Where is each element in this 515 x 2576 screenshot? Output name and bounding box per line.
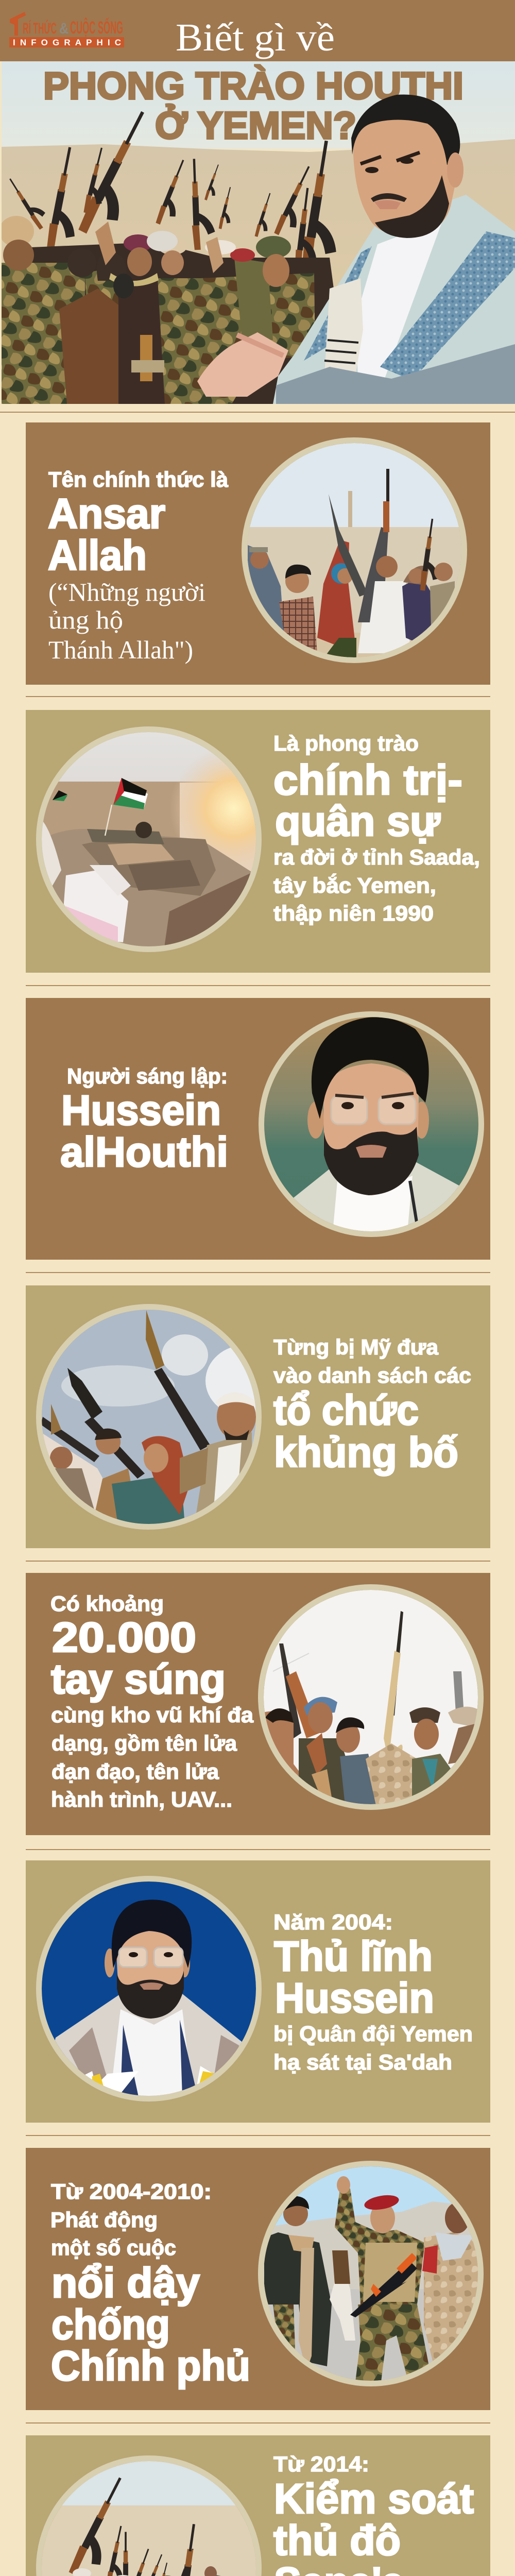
text: fighters and arsenal: dạng, gồm tên lửa — [52, 1731, 237, 1755]
text: fighters and arsenal: Có khoảng — [50, 1591, 164, 1616]
text: founder — [60, 1064, 228, 1176]
text: founder: Hussein — [61, 1087, 221, 1134]
text: movement description: chính trị- — [273, 757, 462, 804]
section 6 — [26, 1860, 490, 2136]
text: US list — [273, 1335, 471, 1476]
panel 6: 2004 killing of Hussein — [26, 1860, 490, 2123]
text: fighters and arsenal: hành trình, UAV... — [51, 1787, 232, 1811]
photo ring — [261, 1587, 481, 1807]
logo: Tri Thuc & Cuoc Song Infographic: RÍ THỨC — [23, 20, 57, 37]
text: year 2004: Năm 2004: — [273, 1910, 393, 1934]
text: movement description: thập niên 1990 — [273, 901, 434, 925]
text: control of the capital: thủ đô — [273, 2517, 401, 2564]
photo ring — [39, 2459, 259, 2576]
photo: Hussein portrait on blue — [39, 1878, 259, 2099]
section 7 — [26, 2148, 490, 2424]
text: uprisings: chống — [52, 2301, 170, 2348]
text: year 2004: Hussein — [275, 1975, 434, 2022]
section 8 — [26, 2435, 490, 2576]
logo: Tri Thuc & Cuoc Song Infographic — [9, 12, 124, 47]
title lines 2 and 3: Ở YEMEN? — [155, 104, 356, 147]
text: year 2004 — [273, 1910, 473, 2074]
text: uprisings: một số cuộc — [51, 2235, 176, 2260]
photo ring — [244, 440, 465, 660]
text: US list: tổ chức — [273, 1387, 419, 1434]
photo: fighters against white sky — [261, 1587, 481, 1810]
text: year 2004: Thủ lĩnh — [274, 1933, 433, 1980]
crowd of fighters — [0, 216, 340, 404]
panel 1: official name — [26, 422, 490, 685]
photo: fighters firing behind stone wall — [36, 726, 262, 952]
logo: Tri Thuc & Cuoc Song Infographic: & — [59, 20, 68, 37]
header banner — [0, 0, 515, 61]
text: movement description: ra đời ở tỉnh Saada, — [273, 845, 480, 869]
section 5 — [26, 1573, 490, 1850]
text: official name: Allah — [48, 532, 147, 579]
title lines 2 and 3 — [43, 64, 464, 147]
header section — [0, 0, 515, 413]
photo ring — [39, 730, 259, 949]
text: uprisings: Phát động — [50, 2208, 158, 2232]
text: uprisings: nổi dậy — [52, 2260, 200, 2307]
hero photo with title — [0, 61, 515, 404]
panel 3: founder — [26, 998, 490, 1260]
text: founder: Người sáng lập: — [67, 1064, 228, 1088]
text: US list: Từng bị Mỹ đưa — [273, 1335, 439, 1359]
text: control of the capital: Kiểm soát — [274, 2476, 474, 2522]
text: fighters and arsenal: 20.000 — [52, 1614, 196, 1661]
text: control of the capital: Từ 2014: — [273, 2452, 369, 2476]
photo ring — [39, 1878, 259, 2099]
text: movement description — [273, 731, 480, 925]
photo ring — [262, 1014, 481, 1234]
text: official name: ủng hộ — [48, 605, 123, 634]
text: US list: vào danh sách các — [273, 1363, 471, 1387]
photo ring — [261, 2164, 481, 2383]
rifles raised by the crowd — [9, 111, 336, 258]
text: uprisings — [50, 2179, 250, 2389]
section 1 — [26, 422, 490, 697]
section 4 — [26, 1285, 490, 1562]
text: fighters and arsenal — [50, 1591, 254, 1811]
text: official name — [48, 467, 229, 664]
text: uprisings: Từ 2004-2010: — [51, 2179, 212, 2204]
text: official name: (“Những người — [48, 578, 205, 606]
text: official name: Ansar — [48, 490, 165, 537]
text: control of the capital — [273, 2452, 479, 2576]
text: movement description: quân sự — [275, 798, 441, 845]
logo: Tri Thuc & Cuoc Song Infographic: CUỘC SỐNG — [70, 18, 123, 38]
photo: armed tribesmen by a wall — [244, 440, 465, 661]
panel 8: control of Sana'a — [26, 2435, 490, 2576]
title line 1: Biết gì về — [176, 16, 335, 59]
text: movement description: tây bắc Yemen, — [273, 873, 436, 897]
text: fighters and arsenal: tay súng — [51, 1656, 226, 1703]
text: official name: Tên chính thức là — [48, 467, 229, 492]
text: fighters and arsenal: đạn đạo, tên lửa — [52, 1759, 219, 1784]
panel 5: 20,000 gunmen — [26, 1573, 490, 1835]
text: uprisings: Chính phủ — [51, 2343, 250, 2389]
photo ring — [39, 1307, 259, 1527]
panel 4: US terrorist list — [26, 1285, 490, 1548]
text: year 2004: bị Quân đội Yemen — [273, 2022, 473, 2046]
text: official name: Thánh Allah") — [48, 635, 193, 664]
photo: crowd of armed fighters — [39, 2459, 259, 2576]
panel 2: politico-military movement — [26, 710, 490, 973]
text: year 2004: hạ sát tại Sa'dah — [273, 2050, 452, 2074]
section 3 — [26, 998, 490, 1273]
photo: Hussein al-Houthi portrait — [262, 1014, 481, 1234]
text: US list: khủng bố — [274, 1429, 458, 1476]
title lines 2 and 3: PHONG TRÀO HOUTHI — [43, 64, 464, 107]
panel 7: uprisings 2004-2010 — [26, 2148, 490, 2410]
photo: fighters with RPG launchers — [39, 1307, 288, 1527]
text: movement description: Là phong trào — [273, 731, 419, 755]
text: fighters and arsenal: cùng kho vũ khí đa — [51, 1703, 254, 1727]
portrait of Abdul Malik al-Houthi — [197, 94, 515, 404]
logo: Tri Thuc & Cuoc Song Infographic: INFOGRAPHIC — [13, 38, 121, 47]
photo: soldiers marching — [261, 2164, 481, 2383]
section 2 — [26, 710, 490, 986]
text: founder: alHouthi — [60, 1129, 228, 1176]
